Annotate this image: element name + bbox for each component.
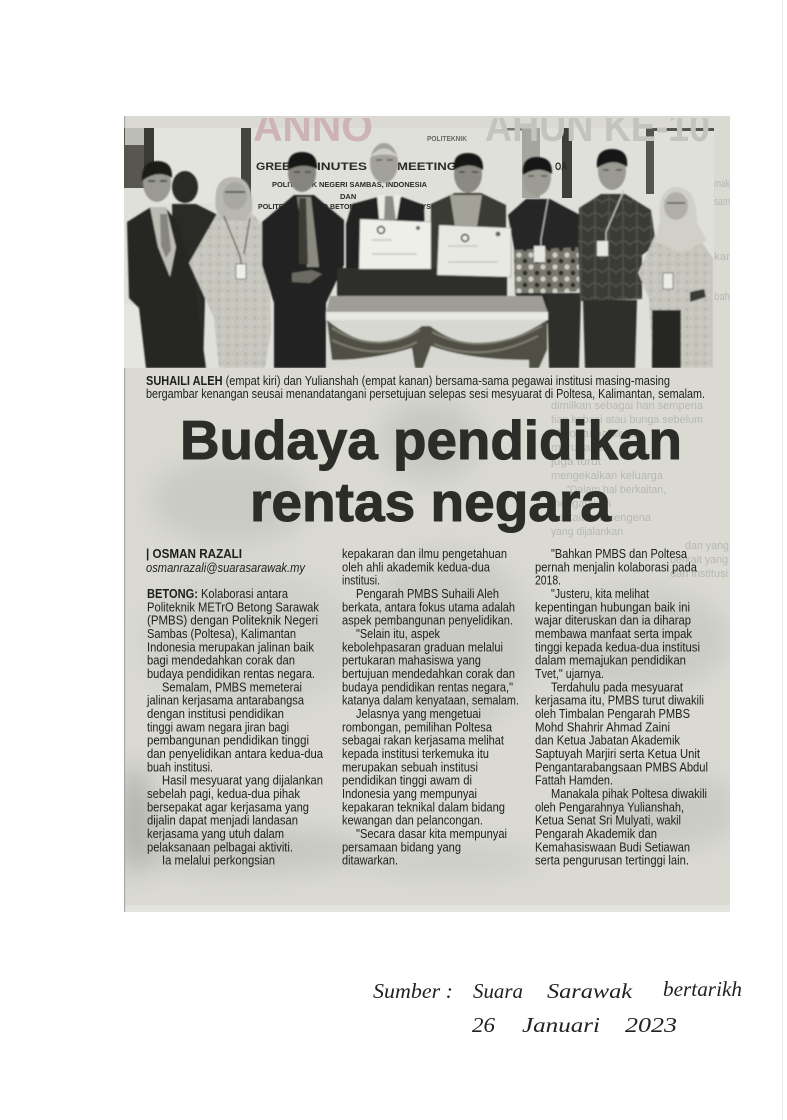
ghost show-through text: dan institusi: [670, 568, 728, 580]
article column 3: wajar diteruskan dan ia diharap: [534, 614, 691, 628]
article column 3: 2018.: [535, 574, 561, 588]
document held left: [359, 219, 431, 269]
headline: rentas negara: [250, 471, 611, 533]
person 8: hijab woman: [638, 187, 713, 368]
signing table: [326, 296, 548, 368]
article column 1: kerjasama yang utuh dalam: [147, 827, 284, 841]
person 4: [344, 142, 426, 269]
article column 2: kewangan dan pelancongan.: [342, 814, 483, 828]
article column 3: "Bahkan PMBS dan Poltesa: [551, 547, 687, 561]
ghost show-through text: kar: [714, 251, 730, 263]
article column 2: Jelasnya yang mengetuai: [356, 707, 481, 721]
article column 2: Indonesia yang mempunyai: [342, 787, 477, 801]
ghost show-through text: [550, 178, 730, 580]
article column 2: aspek pembangunan penyelidikan.: [342, 614, 513, 628]
handwritten source note: bertarikh: [663, 977, 742, 1001]
newspaper clipping panel: [121, 116, 740, 912]
article column 3: kerjasama itu, PMBS turut diwakili: [535, 694, 704, 708]
article column 2: "Secara dasar kita mempunyai: [356, 827, 507, 841]
article column 3: Ketua Senat Sri Mulyati, wakil: [535, 814, 681, 828]
article column 1: buah institusi.: [147, 760, 213, 774]
ghost show-through text: yang dijalankan: [551, 526, 623, 538]
backdrop banner text: AHUN KE-10: [485, 103, 710, 150]
article column 2: Pengarah PMBS Suhaili Aleh: [356, 587, 499, 601]
article column 3: Manakala pihak Poltesa diwakili: [551, 787, 707, 801]
byline: osmanrazali@suarasarawak.my: [146, 561, 306, 575]
ghost show-through text: dimilkan sebagai hari sempena: [551, 400, 704, 412]
ghost show-through text: berkaitkan mengena: [551, 512, 652, 524]
article column 2: rombongan, pemilihan Poltesa: [342, 720, 492, 734]
handwritten source note: 26: [472, 1013, 496, 1037]
article column 2: kepakaran dan ilmu pengetahuan: [342, 547, 507, 561]
article column 2: [342, 547, 519, 868]
byline: | OSMAN RAZALI: [146, 547, 242, 561]
article column 1: Hasil mesyuarat yang dijalankan: [162, 774, 323, 788]
byline: [146, 547, 306, 575]
handwritten source note: Januari: [522, 1013, 600, 1037]
article column 3: oleh Pengarahnya Yulianshah,: [535, 800, 684, 814]
article column 2: pertukaran mahasiswa yang: [342, 654, 481, 668]
article column 2: katanya dalam kenyataan, semalam.: [342, 694, 519, 708]
handwritten source note: Sarawak: [547, 979, 633, 1003]
article column 1: pembangunan pendidikan tinggi: [147, 734, 309, 748]
article column 2: ditawarkan.: [342, 854, 398, 868]
ghost show-through text: mak: [714, 178, 730, 190]
article column 2: institusi.: [342, 574, 380, 588]
article column 1: Politeknik METrO Betong Sarawak: [147, 600, 320, 614]
article column 2: bertujuan mendedahkan corak dan: [342, 667, 515, 681]
headline: Budaya pendidikan: [180, 409, 682, 471]
article column 3: dan Ketua Jabatan Akademik: [535, 734, 681, 748]
person 6: [508, 157, 585, 368]
person 7: [578, 149, 656, 368]
article column 3: Kemahasiswaan Budi Setiawan: [535, 840, 690, 854]
person 3: [262, 152, 344, 368]
article column 2: sebagai rakan kerjasama melihat: [342, 734, 504, 748]
backdrop banner text: POLITEKNIK: [427, 134, 468, 143]
person 2: hijab woman: [189, 177, 271, 368]
article column 1: dijalin dapat menjadi landasan: [147, 814, 298, 828]
article column 2: "Selain itu, aspek: [356, 627, 441, 641]
ghost show-through text: "Dalam hal berkaitan,: [566, 484, 666, 496]
ghost show-through text: juga turut: [550, 456, 601, 468]
article column 3: Mohd Shahrir Ahmad Zaini: [535, 720, 670, 734]
ghost show-through text: berkait yang: [670, 554, 728, 566]
backdrop banner text: [254, 118, 708, 209]
backdrop banner text: DAN: [340, 192, 356, 201]
article column 3: oleh Timbalan Pengarah PMBS: [535, 707, 690, 721]
article column 1: pelaksanaan pelbagai aktiviti.: [147, 840, 293, 854]
backdrop banner text: GREE: [256, 161, 290, 173]
article column 3: Tvet," ujarnya.: [535, 667, 604, 681]
handwritten source note: Suara: [473, 979, 523, 1003]
backdrop banner text: MEETING: [397, 161, 457, 173]
ghost show-through text: bah: [714, 291, 730, 303]
article column 2: pendidikan tinggi awam di: [342, 774, 472, 788]
person 5: batik shirt: [430, 152, 508, 269]
photo caption: bergambar kenangan seusai menandatangani persetujuan selepas sesi mesyuarat di Poltesa, Kalimantan, semalam.: [146, 387, 705, 401]
article column 2: oleh ahli akademik kedua-dua: [342, 560, 490, 574]
article column 1: sebelah pagi, kedua-dua pihak: [147, 787, 301, 801]
article column 1: Semalam, PMBS memeterai: [162, 680, 302, 694]
article column 1: dengan institusi pendidikan: [147, 707, 284, 721]
article column 3: Saptuyah Marjiri serta Ketua Unit: [535, 747, 700, 761]
article column 1: tinggi awam negara jiran bagi: [147, 720, 289, 734]
article column 3: Fattah Hamden.: [535, 774, 613, 788]
handwritten source note: 2023: [625, 1013, 677, 1037]
handwritten source note: Sumber :: [373, 979, 453, 1003]
article column 3: serta pengurusan tertinggi lain.: [535, 854, 689, 868]
handwritten source note: [373, 977, 742, 1037]
ghost show-through text: dan yang: [685, 540, 729, 552]
photo backdrop: [124, 128, 714, 368]
article column 3: dalam memajukan pendidikan: [535, 654, 686, 668]
backdrop banner text: INUTES: [317, 161, 367, 173]
article column 2: kepakaran teknikal dalam bidang: [342, 800, 505, 814]
dark area behind table: [337, 268, 507, 298]
ghost show-through text: sam: [714, 196, 730, 208]
article column 3: pernah menjalin kolaborasi pada: [535, 560, 697, 574]
article column 3: Terdahulu pada mesyuarat: [551, 680, 683, 694]
article column 3: [534, 547, 708, 868]
photo caption: SUHAILI ALEH (empat kiri) dan Yulianshah (empat kanan) bersama-sama pegawai institusi masing-masing: [146, 374, 670, 388]
article column 3: Pengantarabangsaan PMBS Abdul: [535, 760, 708, 774]
article column 2: berkata, antara fokus utama adalah: [342, 600, 515, 614]
article column 1: Ia melalui perkongsian: [162, 854, 275, 868]
headline: [180, 409, 682, 533]
person 1: [127, 161, 206, 368]
ghost show-through text: "Anodai bahawa: [551, 428, 637, 440]
backdrop banner text: POLITEKNIK METRO BETONG SARAWAK, MALAYSIA: [258, 202, 439, 211]
article column 2: kepada institusi terkemuka itu: [342, 747, 489, 761]
article column 3: membawa manfaat serta impak: [535, 627, 693, 641]
document held right: [437, 225, 511, 277]
article column 2: persamaan bidang yang: [342, 840, 461, 854]
article column 2: budaya pendidikan rentas negara,": [342, 680, 513, 694]
article column 3: "Justeru, kita melihat: [551, 587, 649, 601]
article column 1: (PMBS) dengan Politeknik Negeri: [147, 614, 318, 628]
backdrop banner text: ANNO: [253, 103, 373, 150]
article column 1: Sambas (Poltesa), Kalimantan: [147, 627, 296, 641]
ghost show-through text: merupakan: [551, 442, 609, 454]
ghost show-through text: tiap kebasi atau bunga sebelum: [551, 414, 703, 426]
article column 3: Pengarah Akademik dan: [535, 827, 657, 841]
backdrop banner text: POLITEKNIK NEGERI SAMBAS, INDONESIA: [272, 180, 428, 189]
article column 1: bagi mendedahkan corak dan: [147, 654, 295, 668]
photo: signing ceremony group: [124, 103, 714, 368]
article column 1: [146, 587, 323, 868]
person behind left: [171, 170, 218, 350]
article column 3: tinggi kepada kedua-dua institusi: [535, 640, 700, 654]
article column 3: kepentingan hubungan baik ini: [535, 600, 690, 614]
article column 1: Indonesia merupakan jalinan baik: [147, 640, 315, 654]
article column 1: budaya pendidikan rentas negara.: [147, 667, 315, 681]
article column 1: bersepakat agar kerjasama yang: [147, 800, 309, 814]
article column 1: dan penyelidikan antara kedua-dua: [147, 747, 323, 761]
ghost show-through text: mengatakan: [551, 498, 611, 510]
article column 1: jalinan kerjasama antarabangsa: [146, 694, 304, 708]
article column 2: kebolehpasaran graduan melalui: [342, 640, 503, 654]
photo caption: [146, 374, 705, 401]
article column 1: BETONG: Kolaborasi antara: [147, 587, 288, 601]
article column 2: merupakan sebuah institusi: [342, 760, 478, 774]
ghost show-through text: mengekalkan keluarga: [551, 470, 664, 482]
backdrop banner text: OA: [555, 161, 567, 173]
